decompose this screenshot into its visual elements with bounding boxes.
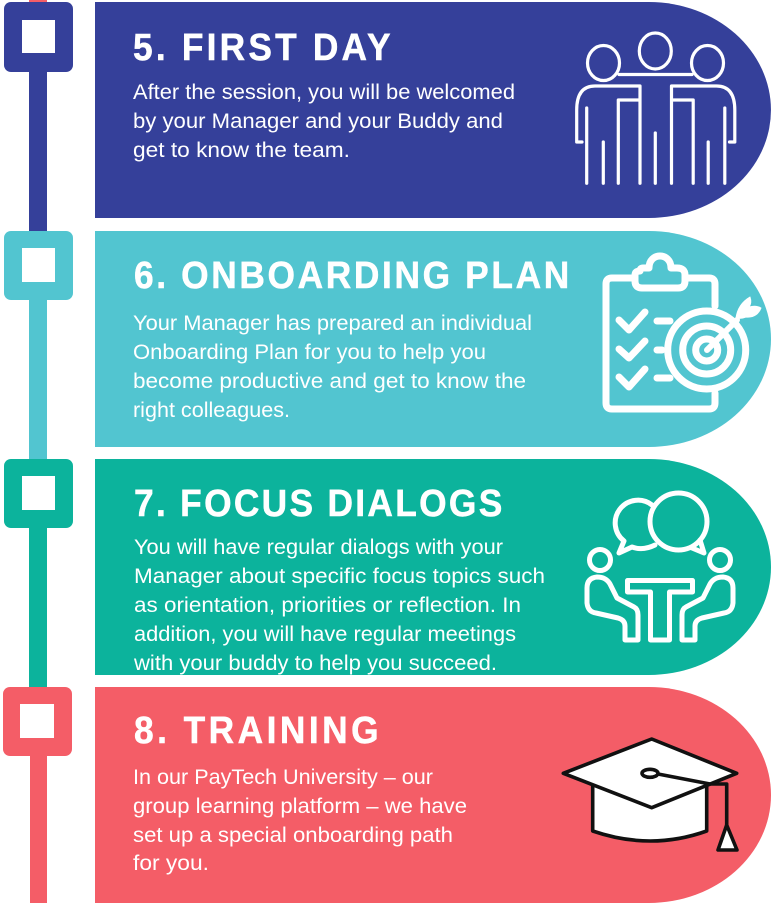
text block: training: group learning platform – we have	[133, 795, 467, 818]
timeline marker 5	[4, 2, 73, 232]
panel: training	[95, 687, 771, 903]
timeline marker 6	[4, 231, 73, 460]
panel: focus dialogs	[95, 459, 771, 675]
text block: onboarding plan: become productive and get to know the	[133, 370, 526, 393]
text block: focus dialogs: as orientation, priorities or reflection. In	[134, 594, 521, 617]
panel: first day	[95, 2, 771, 218]
text block: training: set up a special onboarding path	[133, 824, 453, 847]
text block: first day: by your Manager and your Buddy and	[133, 110, 503, 133]
text block: focus dialogs: You will have regular dialogs with your	[134, 536, 503, 559]
text block: focus dialogs	[133, 536, 545, 675]
text block: first day	[133, 81, 515, 162]
timeline marker 7	[4, 459, 73, 688]
heading: first day: 5. FIRST DAY	[133, 26, 391, 68]
heading: focus dialogs: 7. FOCUS DIALOGS	[134, 482, 502, 524]
text block: focus dialogs: Manager about specific focus topics such	[134, 565, 545, 588]
icon: clipboard checklist with target	[606, 256, 761, 409]
text block: first day: After the session, you will be welcomed	[133, 81, 515, 104]
text block: training	[133, 766, 467, 875]
text block: onboarding plan: Your Manager has prepared an individual	[133, 312, 532, 335]
panel: onboarding plan	[95, 231, 771, 447]
text block: focus dialogs: addition, you will have regular meetings	[134, 623, 516, 646]
timeline rail	[3, 0, 73, 903]
icon: team of three people	[577, 33, 735, 183]
heading: training: 8. TRAINING	[134, 709, 379, 751]
icon: graduation cap	[563, 739, 737, 850]
text block: focus dialogs: with your buddy to help you succeed.	[133, 652, 497, 675]
text block: onboarding plan: Onboarding Plan for you to help you	[133, 341, 486, 364]
heading: onboarding plan: 6. ONBOARDING PLAN	[134, 254, 569, 296]
icon: two people talking at a table	[587, 493, 733, 640]
text block: onboarding plan: right colleagues.	[133, 399, 290, 422]
text block: onboarding plan	[133, 312, 532, 422]
text block: training: for you.	[133, 852, 209, 875]
timeline marker 8	[3, 687, 72, 903]
text block: first day: get to know the team.	[133, 139, 350, 162]
text block: training: In our PayTech University – our	[133, 766, 433, 789]
